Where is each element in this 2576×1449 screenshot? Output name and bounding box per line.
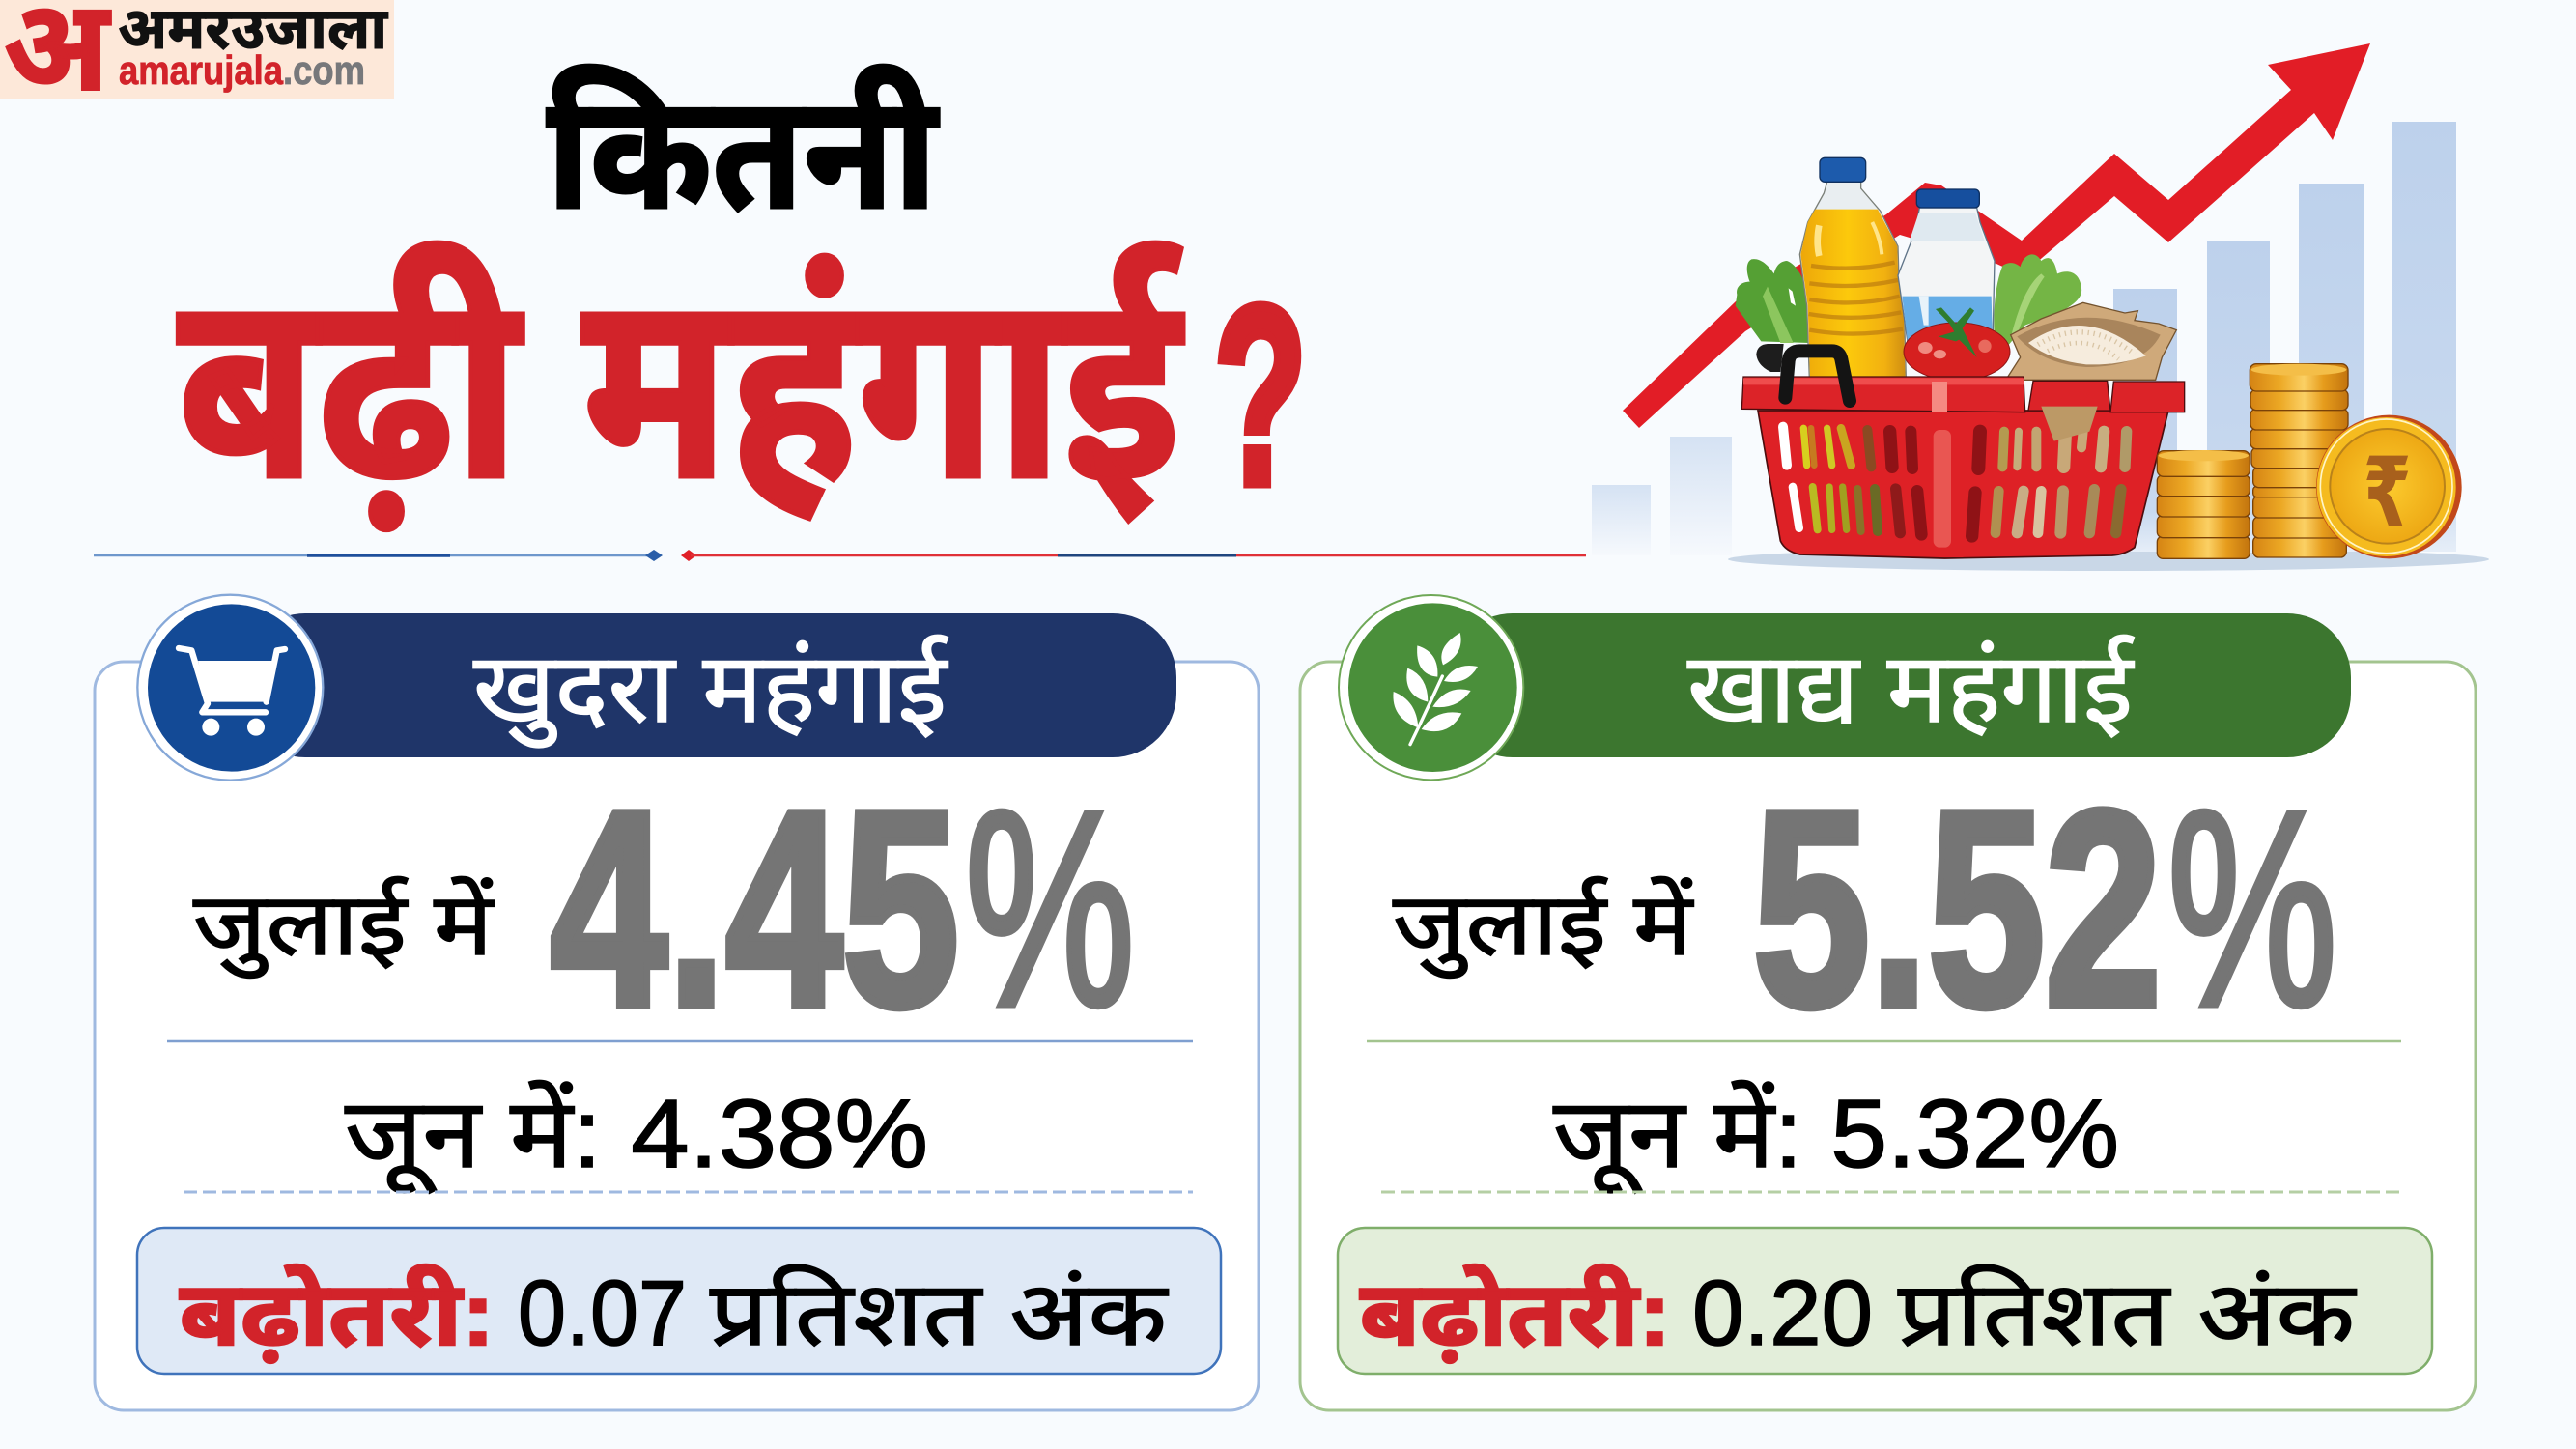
rice sack: [2006, 302, 2176, 380]
big number: %: [965, 753, 1135, 1065]
shadow under basket: [1728, 548, 2489, 571]
header text: खुदरा महंगाई: [473, 635, 948, 749]
callout: increase: 0.07: [518, 1262, 687, 1365]
rupee coin: [2316, 415, 2462, 558]
header pill: [241, 613, 1176, 757]
big number: %: [2167, 753, 2337, 1065]
left greens: [1736, 259, 1809, 343]
panel card: [1300, 662, 2476, 1410]
callout: increase: बढ़ोतरी:: [1360, 1265, 1671, 1364]
callout: increase: 0.20: [1692, 1262, 1873, 1365]
oil bottle: [1799, 157, 1906, 379]
icon: shopping cart: [137, 595, 323, 781]
header text: खाद्य महंगाई: [1687, 635, 2135, 743]
basket handle: [1756, 344, 1850, 401]
june value: जून में: 5.32%: [1553, 1080, 2119, 1194]
callout: increase: [137, 1228, 1221, 1374]
rupee coin: ₹: [2364, 436, 2412, 549]
title: kitni: कितनी: [547, 64, 939, 242]
panel: retail inflation: [95, 595, 1259, 1410]
divider line with diamonds: [94, 550, 1586, 561]
logo: Amar Ujala: [0, 0, 394, 117]
callout: increase: प्रतिशत अंक: [710, 1265, 1170, 1364]
logo: Amar Ujala: amarujala.com: [119, 47, 365, 93]
headline: badhi mehangai: बढ़ी महंगाई: [178, 240, 1186, 533]
july label: जुलाई में: [1393, 876, 1694, 979]
illustration: grocery basket, rising arrow, bars and coins: [1592, 43, 2489, 571]
panel: food inflation: [1300, 595, 2476, 1410]
right greens: [1994, 254, 2081, 345]
bar chart backdrop: [1592, 122, 2456, 555]
header pill: [1449, 613, 2351, 757]
july label: जुलाई में: [193, 876, 495, 979]
small coin stack: [2157, 450, 2250, 558]
callout: increase: बढ़ोतरी:: [180, 1265, 495, 1364]
headline: badhi mehangai: ?: [1214, 254, 1307, 537]
june value: जून में: 4.38%: [345, 1080, 928, 1194]
panel card: [95, 662, 1259, 1410]
icon: leaf sprig: [1339, 595, 1523, 780]
basket: [1741, 377, 2185, 558]
big number: 5.52: [1753, 753, 2162, 1065]
milk bottle: [1898, 189, 1995, 342]
tall coin stack: [2250, 364, 2348, 557]
callout: increase: प्रतिशत अंक: [1898, 1265, 2358, 1364]
callout: increase: [1338, 1228, 2432, 1374]
tomato: [1904, 307, 2010, 381]
big number: 4.45: [551, 753, 959, 1065]
red rising arrow: [1623, 43, 2370, 428]
